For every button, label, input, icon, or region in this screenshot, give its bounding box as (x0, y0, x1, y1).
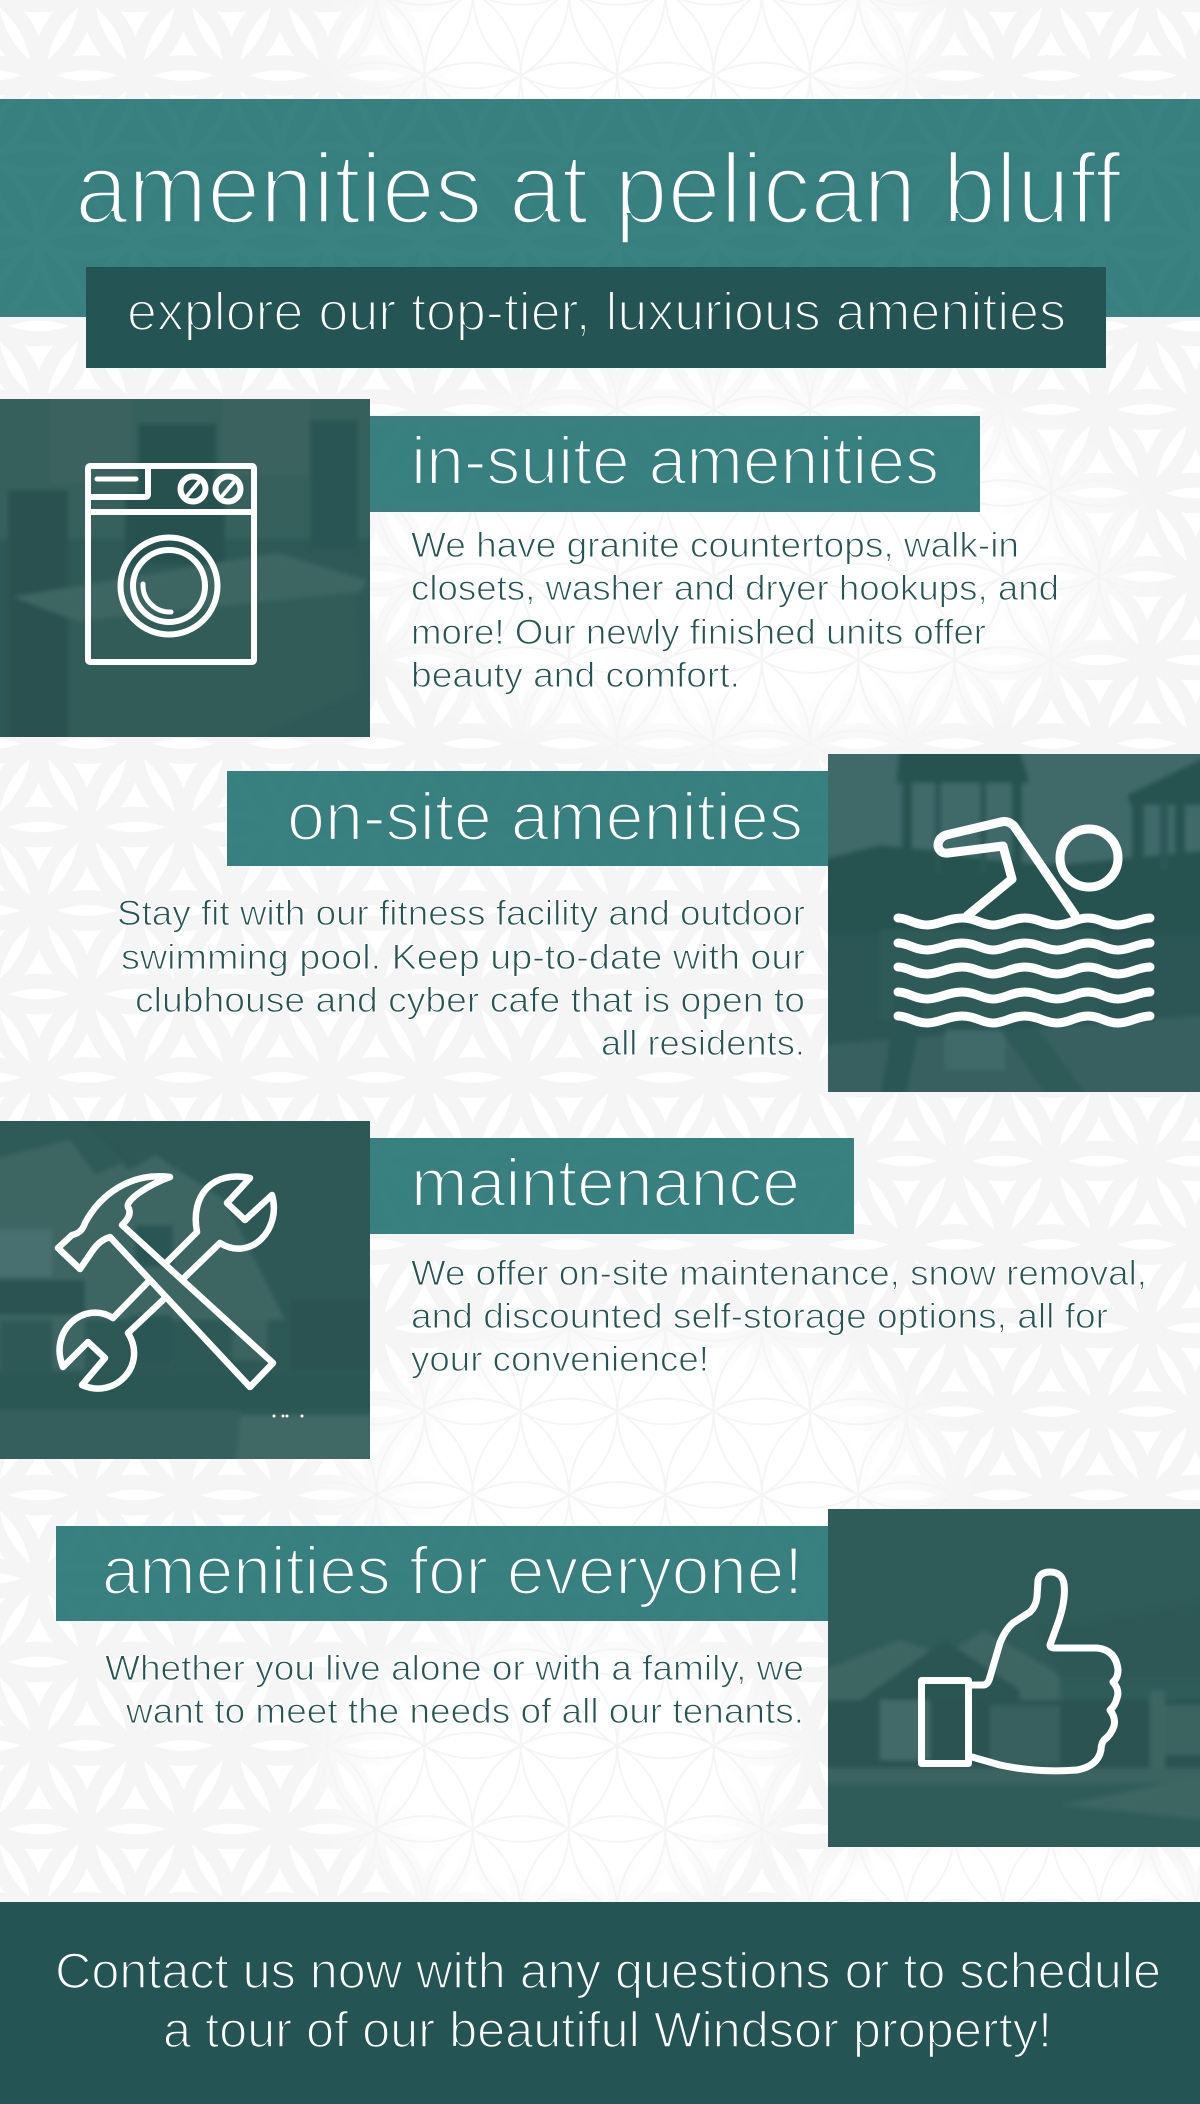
footer call to action: Contact us now with any questions or to schedule (55, 1943, 1161, 1999)
icon: hammer and wrench (58, 1176, 274, 1389)
photo: kitchen (0, 389, 380, 745)
body text (411, 526, 1059, 695)
header banner (0, 99, 1200, 317)
photo: clubhouse (820, 1509, 1200, 1847)
icon: washing machine (88, 466, 254, 662)
body text: We offer on-site maintenance, snow removal, (411, 1254, 1147, 1293)
icon: swimmer (898, 822, 1150, 1023)
heading bar: on-site amenities (287, 779, 803, 855)
body text: clubhouse and cyber cafe that is open to (135, 981, 805, 1020)
photo: building (0, 1115, 380, 1470)
body text (411, 1254, 1147, 1379)
body text (105, 1649, 804, 1731)
footer call to action: a tour of our beautiful Windsor property! (163, 2002, 1052, 2058)
body text: Whether you live alone or with a family, we (105, 1649, 804, 1688)
photo: pool (820, 745, 1200, 1100)
heading bar: amenities for everyone! (102, 1533, 803, 1609)
subtitle bar: explore our top-tier, luxurious amenities (127, 282, 1066, 342)
icon: thumbs up (922, 1572, 1118, 1771)
section: in-suite amenities (0, 389, 1059, 745)
body text: and discounted self-storage options, all for (411, 1297, 1108, 1336)
footer call to action (0, 1902, 1200, 2104)
section: amenities for everyone (56, 1509, 1200, 1847)
heading bar: in-suite amenities (411, 423, 939, 499)
body text (117, 894, 805, 1063)
heading bar (370, 1138, 854, 1234)
body text: want to meet the needs of all our tenants. (125, 1692, 804, 1731)
heading bar: maintenance (411, 1145, 800, 1221)
section: maintenance (0, 1115, 1147, 1470)
body text: swimming pool. Keep up-to-date with our (121, 938, 805, 977)
body text: beauty and comfort. (411, 656, 740, 695)
section: on-site amenities (117, 745, 1200, 1100)
title: amenities at pelican bluff (75, 133, 1121, 245)
heading bar (227, 771, 828, 866)
subtitle bar (86, 267, 1106, 368)
body text: your convenience! (411, 1340, 709, 1379)
body text: Stay fit with our fitness facility and outdoor (117, 894, 805, 933)
body text: all residents. (601, 1024, 805, 1063)
small dots (272, 1414, 304, 1418)
body text: more! Our newly finished units offer (411, 613, 986, 652)
heading bar (370, 416, 980, 512)
body text: closets, washer and dryer hookups, and (411, 569, 1059, 608)
body text: We have granite countertops, walk-in (411, 526, 1019, 565)
